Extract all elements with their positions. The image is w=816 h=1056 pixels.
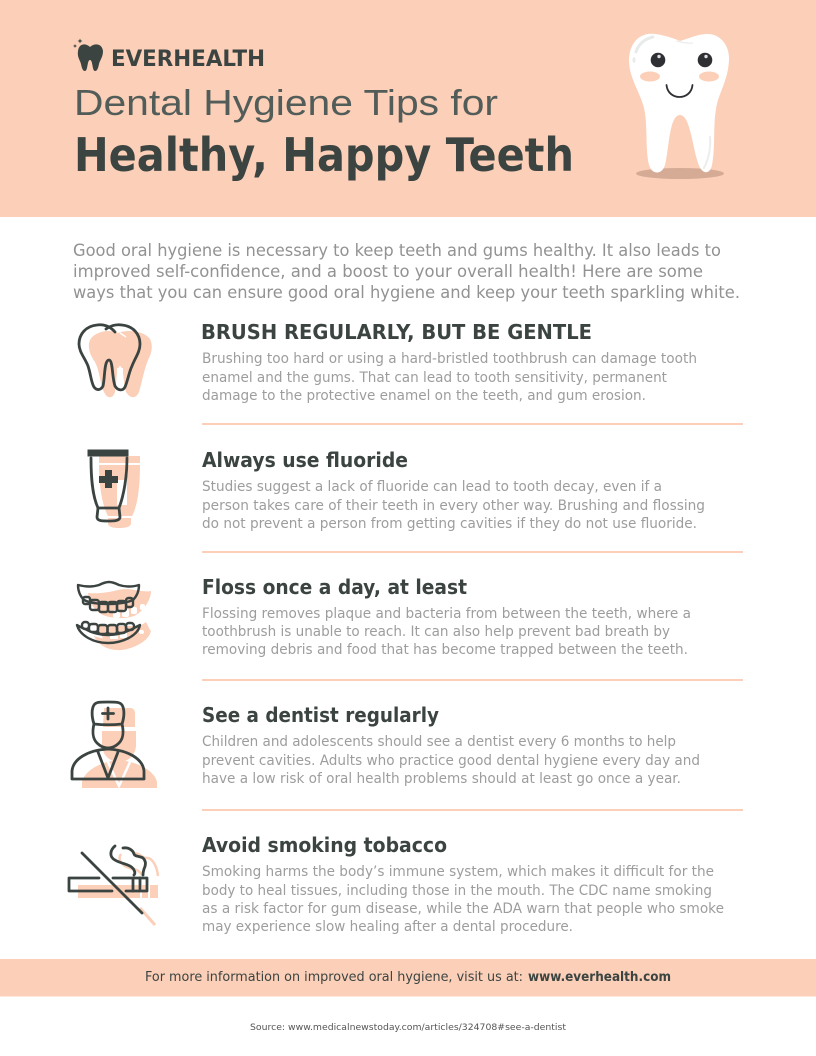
footer text: www.everhealth.com	[528, 969, 671, 985]
intro paragraph: improved self-confidence, and a boost to your overall health! Here are some	[73, 262, 703, 282]
heading: brush regularly: BRUSH REGULARLY, BUT BE GENTLE	[201, 320, 592, 344]
text: dentist: have a low risk of oral health problems should at least go once a year.	[202, 771, 681, 787]
text: smoking: body to heal tissues, including those in the mouth. The CDC name smoking	[202, 883, 712, 899]
text: smoking: Smoking harms the body’s immune system, which makes it difficult for the	[202, 864, 714, 880]
text: brush regularly: Brushing too hard or using a hard-bristled toothbrush can damage tooth	[202, 351, 697, 367]
text: smoking: as a risk factor for gum disease, while the ADA warn that people who smoke	[202, 901, 724, 917]
icon: dentist	[72, 702, 157, 788]
text: floss: removing debris and food that has become trapped between the teeth.	[202, 642, 688, 658]
heading: smoking: Avoid smoking tobacco	[202, 833, 447, 857]
icon: toothpaste tube	[88, 450, 140, 528]
title line 2: Healthy, Happy Teeth	[74, 128, 574, 182]
text: floss	[202, 606, 691, 658]
title line 1: Dental Hygiene Tips for	[74, 82, 498, 123]
text: fluoride	[202, 479, 705, 532]
logo icon	[73, 38, 103, 71]
intro paragraph: ways that you can ensure good oral hygiene and keep your teeth sparkling white.	[73, 283, 740, 303]
text: dentist	[202, 734, 700, 787]
text: dentist: prevent cavities. Adults who practice good dental hygiene every day and	[202, 753, 700, 769]
icon: dentures	[77, 582, 151, 650]
footer text: For more information on improved oral hygiene, visit us at:	[145, 969, 523, 985]
intro paragraph	[73, 241, 740, 303]
icon: no smoking	[69, 846, 158, 925]
text: floss: toothbrush is unable to reach. It can also help prevent bad breath by	[202, 624, 670, 640]
source: Source: www.medicalnewstoday.com/articles/324708#see-a-dentist	[250, 1023, 566, 1033]
header band	[0, 0, 816, 217]
text: smoking: may experience slow healing after a dental procedure.	[202, 919, 573, 935]
text: dentist: Children and adolescents should see a dentist every 6 months to help	[202, 734, 676, 750]
heading: dentist: See a dentist regularly	[202, 703, 439, 727]
text: smoking	[202, 864, 724, 935]
text: floss: Flossing removes plaque and bacteria from between the teeth, where a	[202, 606, 691, 622]
text: brush regularly: enamel and the gums. That can lead to tooth sensitivity, permanent	[202, 370, 667, 386]
icon: tooth	[79, 325, 152, 397]
heading: fluoride: Always use fluoride	[202, 448, 408, 472]
text: fluoride: do not prevent a person from getting cavities if they do not use fluoride.	[202, 516, 697, 532]
footer band	[0, 959, 816, 996]
text: brush regularly: damage to the protective enamel on the teeth, and gum erosion.	[202, 388, 646, 404]
illustration: smiling tooth	[629, 34, 729, 179]
text: brush regularly	[202, 351, 697, 404]
intro paragraph: Good oral hygiene is necessary to keep teeth and gums healthy. It also leads to	[73, 241, 721, 261]
logo wordmark: EVERHEALTH	[111, 47, 265, 72]
heading: floss: Floss once a day, at least	[202, 575, 467, 599]
text: fluoride: person takes care of their teeth in every other way. Brushing and flossing	[202, 498, 705, 514]
text: fluoride: Studies suggest a lack of fluoride can lead to tooth decay, even if a	[202, 479, 662, 495]
